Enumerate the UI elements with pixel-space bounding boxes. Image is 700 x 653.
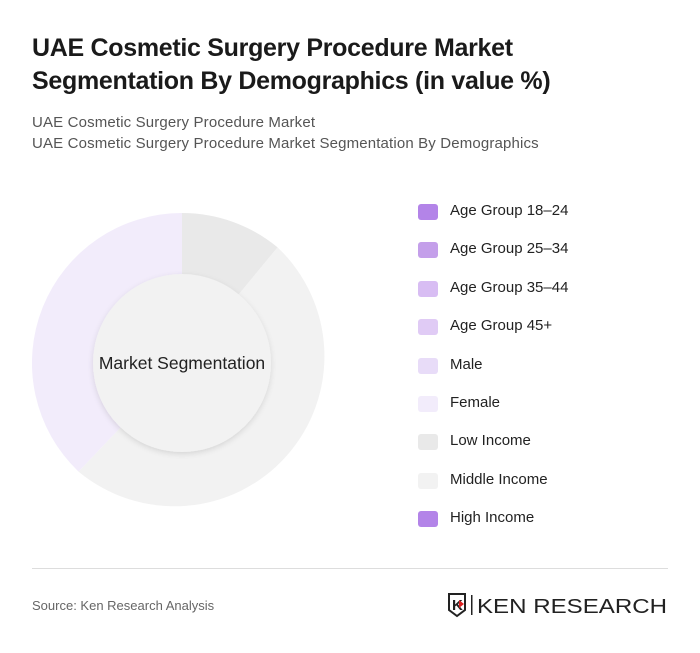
legend: Female — [450, 394, 500, 411]
legend: Low Income — [450, 432, 531, 449]
center label: Market Segmentation — [99, 353, 265, 373]
subtitle: UAE Cosmetic Surgery Procedure Market — [32, 114, 315, 131]
legend: Male — [450, 356, 483, 373]
legend: Age Group 18–24 — [450, 202, 568, 219]
logo: KEN RESEARCH — [477, 596, 667, 618]
segment: middle income — [78, 247, 324, 506]
legend: Age Group 25–34 — [450, 240, 568, 257]
legend: Age Group 35–44 — [450, 279, 568, 296]
segment: low income — [182, 213, 278, 363]
logo — [448, 593, 667, 618]
donut chart — [32, 213, 324, 506]
segment: female — [32, 213, 182, 472]
title — [32, 34, 550, 95]
legend: Middle Income — [450, 471, 548, 488]
subtitle — [32, 114, 539, 152]
center label — [93, 274, 271, 452]
subtitle: UAE Cosmetic Surgery Procedure Market Segmentation By Demographics — [32, 135, 539, 152]
logo: K — [452, 597, 463, 614]
source: Source: Ken Research Analysis — [32, 598, 214, 613]
title: Segmentation By Demographics (in value %) — [32, 67, 550, 95]
title: UAE Cosmetic Surgery Procedure Market — [32, 34, 513, 62]
legend — [418, 202, 568, 527]
legend: Age Group 45+ — [450, 317, 552, 334]
legend: High Income — [450, 509, 534, 526]
